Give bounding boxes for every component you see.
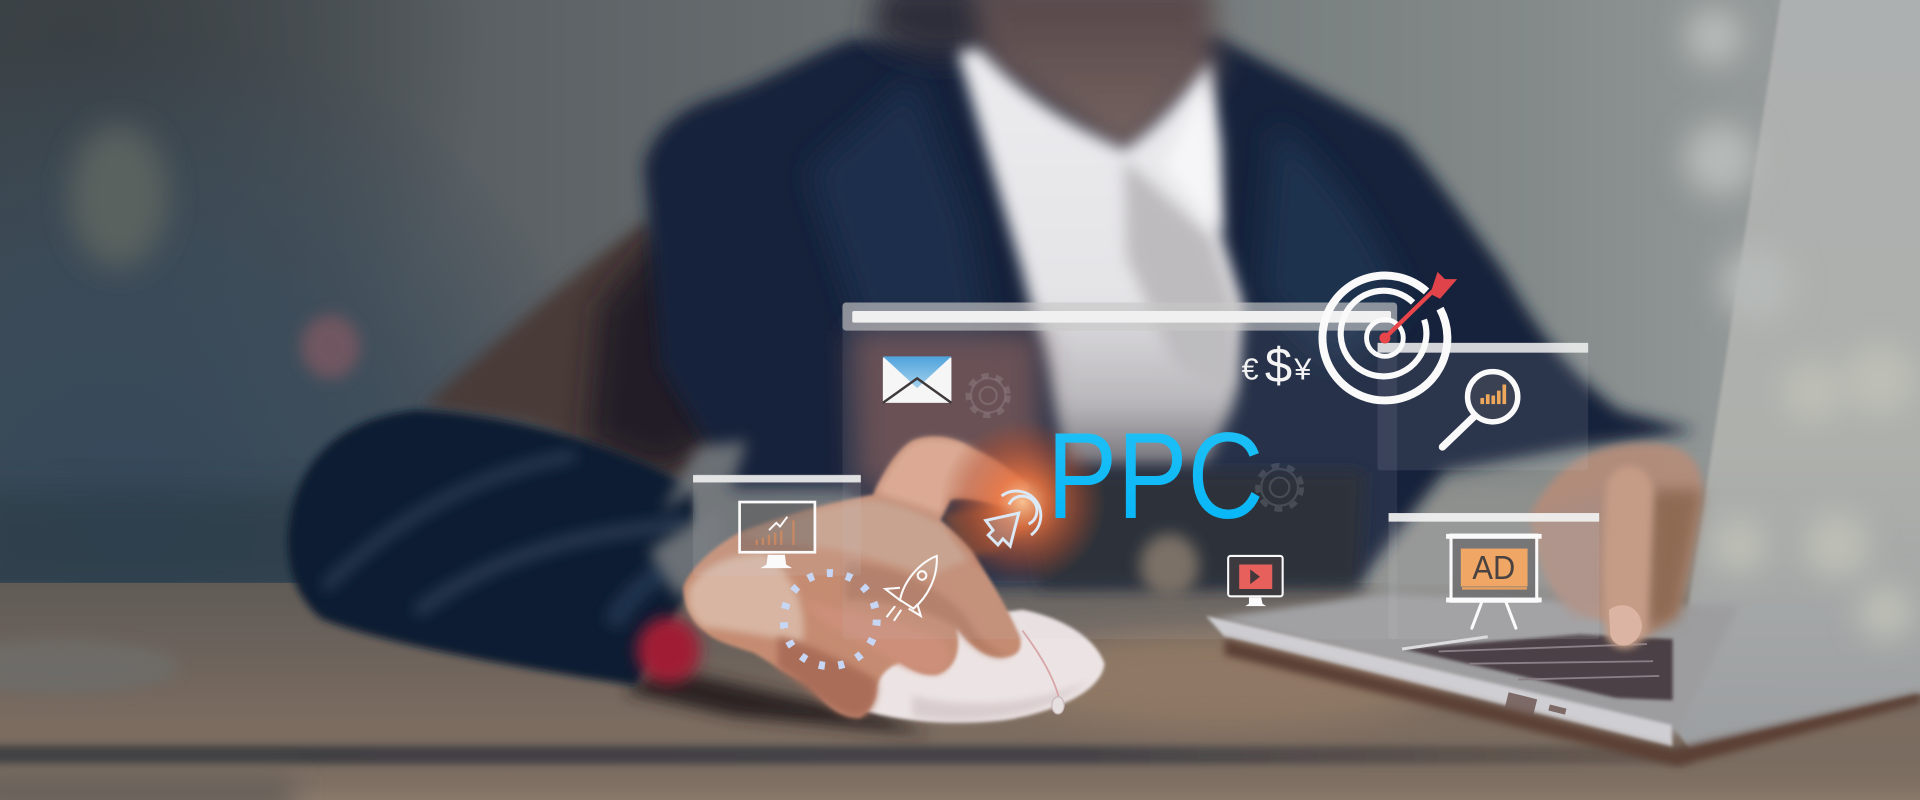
- left hand on mouse: [637, 437, 1030, 718]
- icon: currency symbols: $: [1265, 339, 1292, 393]
- icon: currency symbols: ¥: [1293, 353, 1312, 387]
- person: jacket and shirt: [288, 0, 1696, 686]
- panel: search window: [1378, 343, 1588, 470]
- label: AD: AD: [1472, 550, 1515, 587]
- light grey area behind right side: [1359, 484, 1727, 606]
- laptop base and keyboard: [1206, 594, 1920, 767]
- icon: target with arrow: [1322, 272, 1457, 400]
- icon: dashed progress ring: [784, 573, 877, 666]
- icon: currency symbols: [1242, 339, 1312, 393]
- icon: AD presentation board: [1446, 534, 1542, 628]
- laptop lid: [1670, 0, 1920, 749]
- icon: gear top: [968, 375, 1008, 416]
- icon: analytics monitor: [740, 502, 815, 568]
- icon: video monitor: [1228, 556, 1283, 606]
- icon: envelope: [883, 356, 951, 403]
- panel: main browser window: [842, 302, 1397, 639]
- icon: gear bottom: [1258, 465, 1302, 509]
- icon: click cursor: [986, 491, 1041, 546]
- orange click glow: [939, 419, 1106, 585]
- panel: ad window: [1389, 513, 1599, 639]
- icon: rocket: [885, 556, 937, 621]
- icon: currency symbols: €: [1242, 353, 1259, 387]
- right hand typing on laptop: [1531, 443, 1702, 648]
- icon: magnifier with chart: [1442, 372, 1518, 447]
- computer mouse: [857, 610, 1104, 722]
- heading: PPC: PPC: [1047, 407, 1264, 544]
- panel: analytics window: [693, 474, 861, 576]
- table surface: [0, 583, 1920, 800]
